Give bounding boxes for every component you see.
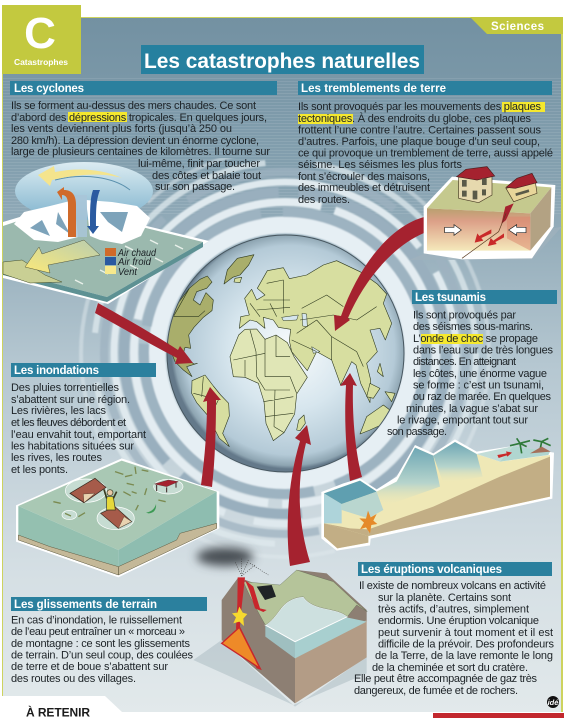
debris <box>53 467 166 517</box>
logo: idé <box>547 696 559 708</box>
Islands of Southeast Asia <box>234 277 395 402</box>
text: landslides: de l’eau peut entraîner un « morceau » <box>11 626 185 638</box>
heading: earthquakes: Les tremblements de terre <box>301 83 446 95</box>
text: volcanic eruptions: de la cheminée et sort du cratère. <box>372 662 528 674</box>
text: cyclones: large de plusieurs centaines de kilomètres. Il tourne sur <box>11 146 270 158</box>
text: cyclones: des côtes et balaie tout <box>152 170 261 182</box>
red table <box>154 480 178 487</box>
text: landslides: de terrain. D’un seul coup, des coulées <box>11 650 194 662</box>
text: floods: l’eau envahit tout, emportant <box>11 429 146 441</box>
text: earthquakes: font s’écrouler des maisons, <box>298 171 430 183</box>
illustration: earthquake block <box>409 167 562 260</box>
heading: tsunamis: Les tsunamis <box>415 292 486 304</box>
panel: floods <box>11 363 156 476</box>
arrow: volcano to globe <box>288 425 311 566</box>
flooded house centre <box>101 507 132 528</box>
text: volcanic eruptions <box>354 580 554 697</box>
text: tsunamis: ou raz de marée. En quelques <box>413 391 552 403</box>
text: tsunamis: le rivage, emportant tout sur <box>397 414 528 426</box>
legend: Vent <box>118 267 138 278</box>
text: earthquakes: d’autres. Parfois, une plaque bouge d’un seul coup, <box>298 136 540 148</box>
illustration: tsunami block <box>321 438 554 551</box>
text: floods: Les rivières, les lacs <box>11 405 106 417</box>
illustration: flood block <box>16 458 219 577</box>
text: floods <box>11 382 146 476</box>
Eurasia <box>239 261 392 403</box>
text: floods: et les ponts. <box>11 464 68 476</box>
highlight: plaques tectoniques <box>298 102 545 124</box>
Inner seas <box>282 313 320 353</box>
title: Les catastrophes naturelles <box>144 50 420 73</box>
category tab: C Catastrophes: C <box>24 9 56 58</box>
logo: idé: idé <box>548 698 558 707</box>
text: tsunamis: les côtes, une énorme vague <box>413 368 547 380</box>
text: volcanic eruptions: dangereux, de fumée et de rochers. <box>354 685 518 697</box>
text: landslides <box>11 614 194 685</box>
text: earthquakes: Ils sont provoqués par les mouvements des plaques <box>298 101 542 113</box>
white arrows <box>445 225 526 235</box>
illustration: volcano <box>193 547 367 707</box>
text: earthquakes: des routes. <box>298 194 350 206</box>
heading: tsunamis <box>412 290 557 304</box>
palm trees <box>510 438 551 453</box>
category tab: Sciences: Sciences <box>491 21 544 33</box>
text: cyclones: sur son passage. <box>155 181 235 193</box>
text: cyclones: les vents deviennent plus forts (jusqu’à 250 ou <box>11 123 232 135</box>
heading: volcanic eruptions: Les éruptions volcaniques <box>361 564 502 576</box>
globe <box>167 235 404 472</box>
heading: earthquakes <box>298 81 552 95</box>
sea block <box>3 205 209 304</box>
text: cyclones: Ils se forment au-dessus des mers chaudes. Ce sont <box>11 100 256 112</box>
text: tsunamis: L’onde de choc se propage <box>413 333 538 345</box>
upper wind arrow <box>38 166 122 186</box>
footer tab: À retenir <box>0 696 564 718</box>
Australia <box>360 405 391 434</box>
text: cyclones: 280 km/h). La dépression devient un énorme cyclone, <box>11 135 259 147</box>
text: cyclones <box>11 100 270 193</box>
yellow surface arrow <box>25 240 100 273</box>
ripples <box>65 479 107 502</box>
illustration: cyclone <box>3 162 209 304</box>
waves <box>377 448 440 507</box>
arrow: cyclones to globe <box>95 303 193 364</box>
heading: floods: Les inondations <box>14 365 99 377</box>
dome <box>15 162 153 220</box>
legend: Air chaud <box>117 248 156 259</box>
text: landslides: de montagne : ce sont les glissements <box>11 638 190 650</box>
heading: volcanic eruptions <box>358 562 552 576</box>
text: tsunamis: des séismes sous-marins. <box>413 321 533 333</box>
left water <box>324 493 342 523</box>
text: tsunamis <box>387 310 554 438</box>
heading: landslides: Les glissements de terrain <box>14 599 157 611</box>
highlight: depressions <box>68 112 127 122</box>
highlight: onde de choc <box>421 334 483 344</box>
text: earthquakes: séisme. Les séismes les plus forts <box>298 159 462 171</box>
arrow: floods to globe <box>201 387 221 487</box>
South America <box>192 375 229 447</box>
text: tsunamis: minutes, la vague s’abat sur <box>406 403 538 415</box>
legend: Air froid <box>117 257 151 268</box>
text: cyclones: d’abord des dépressions tropicales. En quelques jours, <box>11 112 267 124</box>
text: landslides: de terre et de boue s’abattent sur <box>11 661 168 673</box>
arrow: tsunami to globe <box>340 373 362 481</box>
clouds <box>14 200 150 244</box>
text: earthquakes: des immeubles et détruisent <box>298 182 430 194</box>
red arrows <box>475 229 504 246</box>
text: landslides: En cas d’inondation, le ruissellement <box>11 614 182 626</box>
sea bed <box>324 457 550 548</box>
panel: cyclones <box>10 81 277 193</box>
shock star <box>359 511 377 533</box>
legend <box>105 248 156 278</box>
black ash <box>257 585 276 600</box>
panel: volcanic eruptions <box>354 562 554 697</box>
heading: floods <box>11 363 156 377</box>
text: earthquakes: ce qui provoque un tremblement de terre, aussi appelé <box>298 148 553 160</box>
text: tsunamis: distances. En atteignant <box>413 356 516 368</box>
panel: tsunamis <box>387 290 557 438</box>
person on the roof <box>107 497 115 510</box>
panel: landslides <box>11 597 207 685</box>
warm air arrow <box>57 187 76 237</box>
text: earthquakes: tectoniques. À des endroits du globe, ces plaques <box>298 112 532 125</box>
North America <box>167 276 213 377</box>
text: tsunamis: Ils sont provoqués par <box>413 310 516 322</box>
flooded house left <box>70 478 106 503</box>
concentric shock-wave rings <box>81 149 489 557</box>
text: earthquakes <box>298 101 553 206</box>
footer red bar <box>433 713 564 718</box>
Greenland <box>224 255 254 284</box>
green slopes <box>243 570 367 625</box>
heading: cyclones <box>10 81 277 95</box>
ground faces <box>222 570 367 703</box>
smoke <box>197 547 253 566</box>
text: floods: les habitations situées sur <box>11 440 134 452</box>
text: volcanic eruptions: peut survenir à tout moment et il est <box>378 627 553 639</box>
text: volcanic eruptions: Il existe de nombreux volcans en activité <box>359 580 546 592</box>
heading: landslides <box>11 597 207 611</box>
text: volcanic eruptions: difficile de la prévoir. Des profondeurs <box>378 638 554 650</box>
Madagascar <box>297 415 305 431</box>
cold air arrow <box>87 190 100 234</box>
house right <box>506 182 537 202</box>
house left <box>459 176 492 203</box>
text: tsunamis: se forme : c’est un tsunami, <box>413 380 544 392</box>
text: volcanic eruptions: Elle peut être accompagnée de gaz très <box>354 673 538 685</box>
text: cyclones: lui-même, finit par toucher <box>138 158 260 170</box>
Africa <box>230 329 307 441</box>
text: volcanic eruptions: endormis. Une éruption volcanique <box>378 615 539 627</box>
text: volcanic eruptions: de la Terre, de la lave remonte le long <box>375 650 553 662</box>
lava <box>236 577 262 670</box>
arrow: earthquake to globe <box>334 217 424 331</box>
text: tsunamis: son passage. <box>387 426 447 438</box>
category tab: C Catastrophes: Catastrophes <box>14 57 68 67</box>
text: earthquakes: frottent l’une contre l’autre. Certaines passent sous <box>298 124 542 136</box>
text: landslides: des routes ou des villages. <box>11 673 136 685</box>
text: volcanic eruptions: très actifs, d’autres, simplement <box>378 604 529 616</box>
category tab: C Catastrophes <box>2 5 81 74</box>
category tab: Sciences <box>470 17 563 34</box>
text: tsunamis: dans l’eau sur de très longues <box>413 344 554 356</box>
panel: earthquakes <box>298 81 553 206</box>
Frontier lines <box>173 280 377 433</box>
text: floods: s’abattent sur une région. <box>11 394 130 406</box>
text: volcanic eruptions: sur la planète. Certains sont <box>378 592 511 604</box>
heading: cyclones: Les cyclones <box>14 83 84 95</box>
central column <box>74 195 87 237</box>
red wave arrow <box>497 451 512 458</box>
text: floods: et les fleuves débordent et <box>11 417 126 429</box>
text: floods: les rives, les routes <box>11 452 102 464</box>
text: floods: Des pluies torrentielles <box>11 382 120 394</box>
